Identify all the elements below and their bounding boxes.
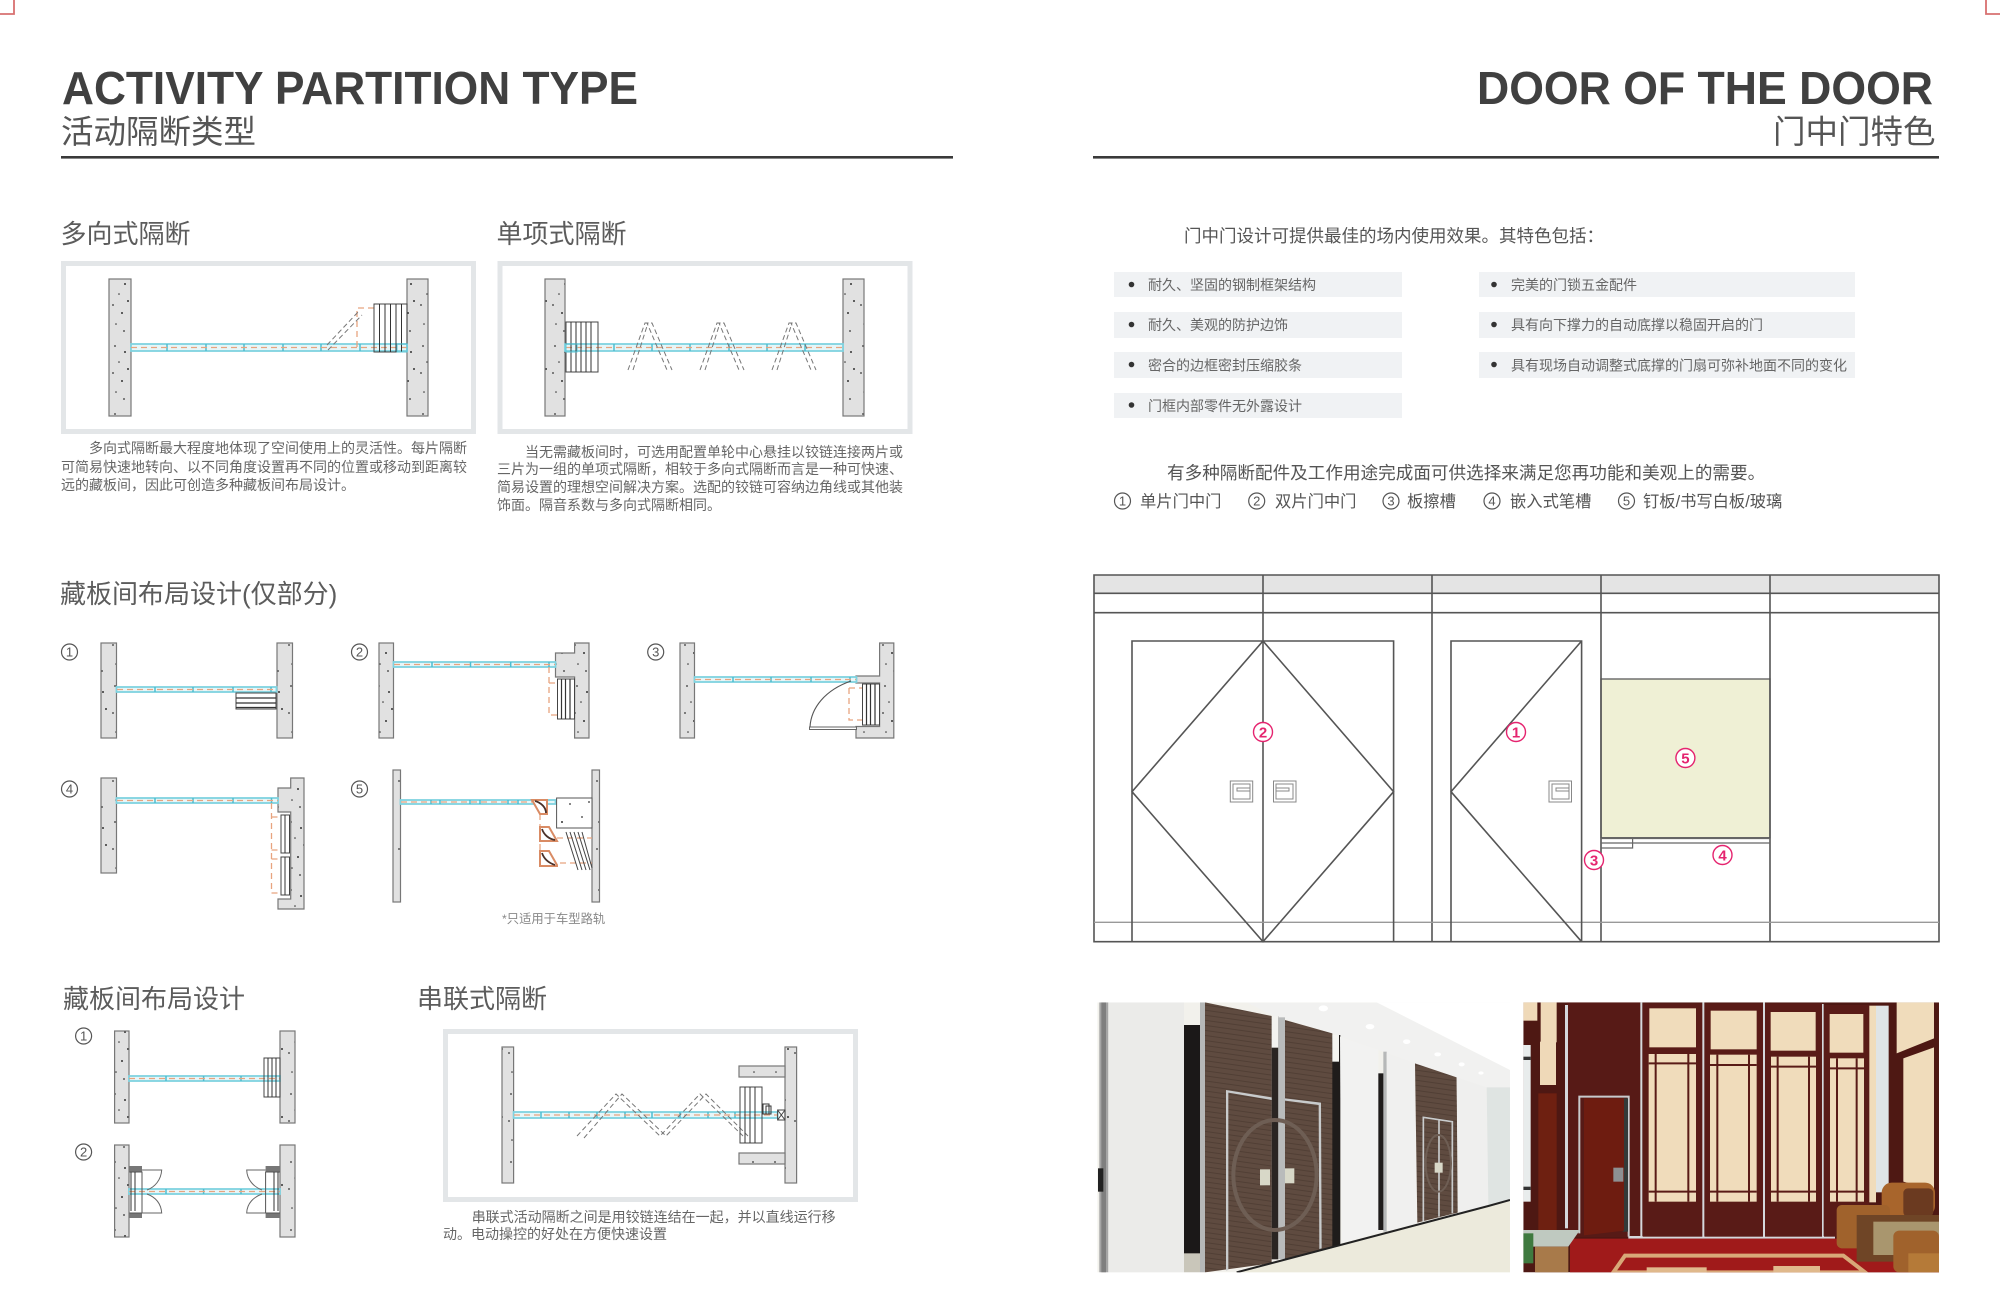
callout 5: 5 [1681, 750, 1690, 768]
callout 3 [1584, 850, 1604, 870]
number 2 [352, 644, 368, 660]
number 4 [62, 781, 78, 797]
accessories legend: 1 [1119, 494, 1126, 508]
item: 密合的边框密封压缩胶条 [1148, 358, 1302, 374]
description [497, 444, 903, 513]
item: 完美的门锁五金配件 [1511, 277, 1637, 293]
description [61, 440, 467, 493]
text block: accessories intro: 有多种隔断配件及工作用途完成面可供选择来满足您再功能和美观上的需要。 [1167, 463, 1765, 483]
number 4: 4 [66, 782, 73, 796]
description: 可简易快速地转向、以不同角度设置再不同的位置或移动到距离较 [61, 459, 467, 475]
heading: 单项式隔断 [496, 219, 627, 249]
number 5 [352, 781, 368, 797]
panel: storage layouts [63, 984, 295, 1237]
description: 饰面。隔音系数与多向式隔断相同。 [497, 497, 721, 513]
feature list left [1114, 272, 1402, 418]
item [1479, 272, 1855, 297]
description: 远的藏板间，因此可创造多种藏板间布局设计。 [61, 477, 355, 493]
title block: left page [61, 62, 953, 159]
description [443, 1209, 836, 1242]
diagram frame [500, 264, 910, 432]
accessories legend: 单片门中门 [1140, 493, 1221, 511]
callout 2 [1254, 722, 1272, 742]
callout 4 [1713, 846, 1732, 864]
title chinese: 活动隔断类型 [61, 114, 256, 150]
panel: multi-directional partition [60, 219, 474, 493]
door elevation drawing [1094, 575, 1939, 942]
diagram 4: side pocket stack [62, 778, 304, 909]
accessories legend: 钉板/书写白板/玻璃 [1643, 493, 1782, 511]
tray and eraser slot [1601, 838, 1770, 848]
accessories legend: 2 [1253, 494, 1260, 508]
item [1114, 352, 1402, 378]
item [1479, 312, 1855, 338]
heading: storage layouts (partial): 藏板间布局设计(仅部分) [60, 579, 337, 609]
item [1114, 272, 1402, 297]
description: 当无需藏板间时，可选用配置单轮中心悬挂以铰链连接两片或 [525, 444, 903, 460]
accessories legend: 3 [1387, 494, 1395, 508]
item: 具有向下撑力的自动底撑以稳固开启的门 [1511, 317, 1763, 333]
crop mark top left [0, 0, 14, 14]
green board panel [1601, 679, 1770, 838]
layout 1 [76, 1028, 295, 1123]
diagram 1: straight stack [62, 643, 292, 738]
number 2: 2 [80, 1144, 87, 1160]
number 5: 5 [356, 782, 363, 796]
panel: single-direction partition [496, 219, 910, 513]
callout 1 [1506, 722, 1526, 742]
heading: 串联式隔断 [417, 984, 547, 1014]
title english: DOOR OF THE DOOR [1477, 62, 1933, 114]
accessories legend: 4 [1488, 494, 1496, 508]
callout 5 [1676, 748, 1695, 768]
item [1479, 352, 1855, 378]
callout 1: 1 [1512, 724, 1520, 742]
accessories legend: 5 [1623, 494, 1630, 508]
double door [1132, 641, 1394, 942]
frame lines [1094, 575, 1939, 942]
diagram 3: stack with curved door [648, 643, 894, 738]
panel: series partition [417, 984, 856, 1242]
callout 3: 3 [1590, 852, 1598, 870]
description: 三片为一组的单项式隔断，相较于多向式隔断而言是一种可快速、 [497, 461, 903, 477]
description: 动。电动操控的好处在方便快速设置 [443, 1226, 667, 1242]
footnote: *只适用于车型路轨 [502, 911, 605, 926]
diagram frame [64, 264, 474, 432]
single door [1451, 641, 1582, 942]
item [1114, 312, 1402, 338]
title english: ACTIVITY PARTITION TYPE [62, 62, 638, 114]
number 1 [62, 644, 78, 660]
title block: right page [1093, 62, 1939, 159]
item: 门框内部零件无外露设计 [1148, 398, 1302, 414]
door handles [1230, 781, 1572, 802]
accessories legend: 嵌入式笔槽 [1510, 493, 1591, 511]
heading: 藏板间布局设计 [63, 984, 245, 1014]
text block: door features intro: 门中门设计可提供最佳的场内使用效果。其特色包括： [1184, 226, 1604, 246]
number 1 [76, 1028, 92, 1044]
feature list right [1479, 272, 1855, 378]
title rule [61, 156, 953, 159]
accessories legend [1114, 493, 1782, 511]
item: 耐久、坚固的钢制框架结构 [1148, 277, 1316, 293]
callout 2: 2 [1259, 724, 1267, 742]
accessories legend: 板擦槽 [1407, 493, 1456, 511]
diagram 5: trolley track stack [352, 770, 600, 902]
heading: 多向式隔断 [60, 219, 191, 249]
diagram 2: recessed stack [352, 643, 589, 738]
item: 具有现场自动调整式底撑的门扇可弥补地面不同的变化 [1511, 358, 1847, 374]
layout 2 [76, 1144, 295, 1237]
diagram: multi-directional plan [109, 279, 428, 416]
item: 耐久、美观的防护边饰 [1148, 317, 1288, 333]
callout 4: 4 [1718, 848, 1727, 864]
number 3: 3 [652, 644, 659, 660]
number 3 [648, 644, 664, 660]
description: 串联式活动隔断之间是用铰链连结在一起，并以直线运行移 [472, 1209, 836, 1225]
photo: wood and cream partition with door [1523, 1002, 1939, 1272]
description: 多向式隔断最大程度地体现了空间使用上的灵活性。每片隔断 [89, 440, 467, 456]
title chinese: 门中门特色 [1773, 114, 1936, 150]
number 2 [76, 1144, 92, 1160]
number 1: 1 [80, 1028, 87, 1044]
crop mark top right [1986, 0, 2000, 14]
header band [1094, 575, 1939, 593]
diagram frame [446, 1032, 856, 1200]
item [1114, 393, 1402, 418]
description: 简易设置的理想空间解决方案。选配的铰链可容纳边角线或其他装 [497, 479, 903, 495]
number 1: 1 [66, 644, 73, 660]
diagram: series plan [502, 1047, 797, 1183]
title rule [1093, 156, 1939, 159]
number 2: 2 [356, 644, 363, 660]
diagram: single-direction plan [545, 279, 864, 416]
accessories legend: 双片门中门 [1275, 493, 1356, 511]
photo: brown and white partition wall [1097, 1002, 1510, 1272]
